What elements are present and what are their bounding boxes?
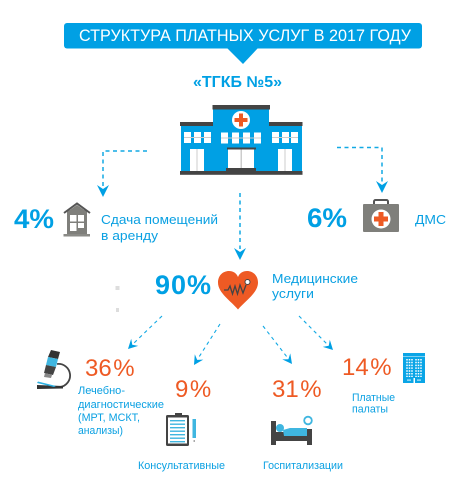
icon: heart with pulse bbox=[218, 271, 258, 310]
icon: bed bbox=[271, 417, 312, 445]
stat: 4% rental: 4% bbox=[14, 204, 54, 234]
arrow: to consultations bbox=[190, 324, 220, 368]
subtitle: hospital name: «ТГКБ №5» bbox=[193, 74, 282, 91]
icon: house bbox=[64, 204, 90, 236]
arrow: to hospitalization bbox=[263, 326, 296, 367]
stat: 36% diagnostics: 36% bbox=[85, 355, 135, 382]
label: paid wards: Платные bbox=[352, 392, 395, 404]
label: rental: Сдача помещений bbox=[101, 213, 218, 227]
label: rental: в аренду bbox=[101, 229, 159, 243]
arrow: to medical services bbox=[234, 193, 246, 260]
label: DMS: ДМС bbox=[415, 213, 446, 227]
arrow: to diagnostics bbox=[124, 316, 162, 353]
title banner: СТРУКТУРА ПЛАТНЫХ УСЛУГ В 2017 ГОДУ bbox=[79, 27, 411, 45]
label: diagnostics bbox=[78, 385, 164, 437]
label: medical services: услуги bbox=[272, 287, 314, 301]
icon: first aid kit bbox=[363, 200, 399, 232]
stat: 31% hospitalization: 31% bbox=[272, 376, 322, 403]
decorative specks bbox=[116, 286, 120, 312]
label: medical services: Медицинские bbox=[272, 272, 358, 286]
icon: office building bbox=[403, 353, 425, 383]
arrow: to DMS bbox=[337, 148, 388, 193]
stat: 14% paid wards: 14% bbox=[342, 354, 392, 381]
label: paid wards bbox=[352, 392, 395, 416]
label: diagnostics: анализы) bbox=[78, 425, 123, 437]
icon: hospital building bbox=[180, 105, 302, 175]
icon: clipboard bbox=[166, 413, 196, 446]
label: diagnostics: (МРТ, МСКТ, bbox=[78, 412, 140, 424]
label: diagnostics: Лечебно- bbox=[78, 385, 125, 397]
title banner bbox=[64, 23, 422, 64]
label: paid wards: палаты bbox=[352, 404, 388, 416]
icon: microscope bbox=[37, 350, 70, 389]
stat: 90% medical: 90% bbox=[155, 270, 211, 300]
arrow: to paid wards bbox=[299, 316, 337, 354]
stat: 9% consultations: 9% bbox=[175, 376, 211, 403]
label: medical services bbox=[272, 272, 358, 301]
label: consultations: Консультативные bbox=[138, 460, 225, 472]
arrow: to rental bbox=[97, 151, 147, 197]
label: rental bbox=[101, 213, 218, 243]
label: hospitalization: Госпитализации bbox=[263, 460, 343, 472]
stat: 6% DMS: 6% bbox=[307, 203, 347, 233]
label: diagnostics: диагностические bbox=[78, 399, 164, 411]
